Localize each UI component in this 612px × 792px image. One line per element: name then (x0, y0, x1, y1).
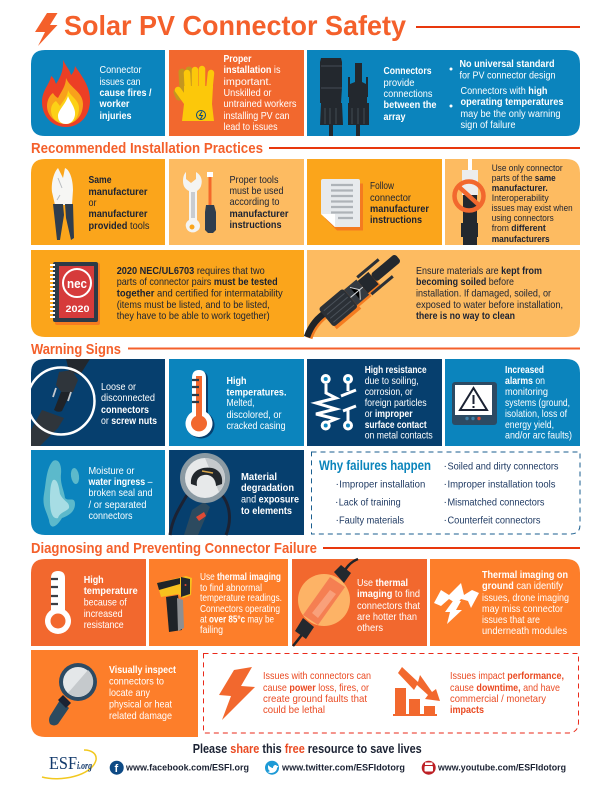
text (505, 365, 572, 442)
impact text (450, 671, 564, 716)
text: cause fires / (100, 88, 152, 99)
text: related damage (109, 711, 172, 722)
icon: resistor and open switch (316, 376, 356, 429)
text: others (357, 623, 383, 634)
text (230, 175, 288, 231)
panel: proper installation (169, 50, 304, 136)
heading: Why failures happen (319, 458, 431, 473)
panel: thermal readings (149, 559, 288, 646)
text: untrained workers (224, 99, 296, 110)
text: and/or arc faults) (505, 430, 572, 442)
text: Thermal imaging on (482, 570, 568, 581)
text: failing (200, 625, 223, 636)
text: manufacturer (88, 209, 148, 220)
icon: lightning bolt (35, 13, 58, 46)
text: manufacturer. (492, 183, 548, 194)
text: from different (492, 223, 546, 234)
text: issues may exist when (492, 203, 573, 214)
text: corrosion, or (365, 387, 413, 398)
text: ground can identify (482, 581, 564, 592)
text (101, 382, 157, 427)
social: facebook: f (114, 763, 118, 775)
text: worker (99, 99, 130, 110)
failure list: Mismatched connectors (448, 498, 544, 508)
text: due to soiling, (365, 376, 419, 387)
impact text: impacts (450, 705, 484, 716)
icon: flame (42, 60, 90, 127)
text: Interoperability (492, 193, 549, 204)
logo: ESFi.org (42, 750, 96, 779)
impact text: commercial / monetary (450, 694, 547, 705)
text (200, 572, 282, 636)
icon: no mixed connectors (454, 159, 484, 245)
panel: high resistance (307, 359, 442, 446)
text: cracked casing (226, 421, 286, 432)
text: resistance (84, 620, 124, 631)
text: Same (88, 175, 112, 186)
impact text: Issues impact performance, (450, 671, 564, 682)
icon: screwdriver (205, 172, 216, 233)
logo: ESFi.org: ESF (49, 753, 77, 773)
text: instructions (230, 220, 282, 231)
bullet text: operating temperatures (460, 97, 564, 108)
text: Ensure materials are kept from (416, 266, 542, 277)
bullet text (450, 59, 564, 131)
panel: proper tools (169, 159, 304, 245)
icon: white thermometer (45, 571, 71, 634)
text: are hotter than (357, 612, 417, 623)
text: and exposure (241, 494, 299, 506)
icon: thermal camera (157, 576, 192, 632)
text (384, 66, 437, 123)
text (482, 570, 569, 637)
text: installation is (224, 65, 280, 76)
bullet text: for PV connector design (460, 70, 556, 82)
text: at over 85°c may be (200, 614, 274, 626)
panel: loose connectors (28, 359, 165, 446)
text (109, 665, 176, 722)
text: underneath modules (482, 626, 567, 637)
text: temperature (84, 586, 138, 597)
panel: same manufacturer parts (445, 159, 580, 245)
text: manufacturers (492, 234, 550, 245)
text: imaging to find (357, 589, 420, 600)
panel: high temperature (31, 559, 146, 646)
panel: visual inspection (31, 650, 198, 737)
text: installing PV can (224, 111, 290, 122)
text: 2020 NEC/UL6703 requires that two (117, 266, 265, 277)
text: on metal contacts (365, 430, 433, 442)
icon: gloves (177, 69, 214, 121)
text: temperature readings. (200, 593, 282, 604)
bullet text: Connectors with high (460, 86, 548, 97)
text: manufacturer (88, 187, 148, 198)
heading: recommended installation practices: Recommended Installation Practices (31, 140, 263, 157)
consequence text: Issues with connectors can (263, 671, 371, 682)
text (357, 578, 420, 634)
text (370, 181, 429, 226)
text: Visually inspect (109, 665, 176, 676)
panel: same manufacturer tools (31, 159, 165, 245)
text: there is no way to clean (416, 311, 515, 322)
text: Increased (505, 365, 544, 376)
text: broken seal and (88, 488, 153, 499)
failure list: · (444, 461, 447, 472)
text: may miss connector (482, 604, 563, 615)
text: foreign particles (365, 398, 427, 409)
text (492, 163, 573, 245)
text: connectors that (357, 601, 420, 612)
icon: document (321, 179, 363, 230)
text: issues can (100, 77, 141, 88)
logo: ESFi.org: i.org (77, 761, 92, 772)
social: youtube: www.youtube.com/ESFIdotorg (437, 762, 566, 774)
text: installation. If damaged, soiled, or (416, 288, 551, 300)
text (365, 365, 433, 442)
panel: material degradation (169, 450, 304, 535)
panel: keep materials clean (307, 248, 580, 338)
social: twitter: www.twitter.com/ESFIdotorg (281, 762, 405, 774)
failure list: Faulty materials (339, 516, 404, 526)
text: together and certified for intermatability (117, 288, 283, 300)
failure list: Lack of training (339, 498, 401, 508)
failure list: · (336, 479, 339, 490)
text (88, 466, 153, 522)
icon: declining bar chart (393, 667, 440, 716)
panel: connector fires (31, 50, 165, 136)
text: connectors (88, 511, 132, 522)
panel: hotter connectors (292, 559, 427, 646)
text: surface contact (365, 420, 427, 431)
panel: increased alarms (445, 359, 580, 446)
failure list: · (444, 515, 447, 526)
icon: orange lightning bolt (219, 667, 255, 720)
panel: thermal imaging on ground (430, 559, 580, 646)
consequence text (263, 671, 371, 716)
text: water ingress – (88, 477, 153, 488)
icon: monitor alarm (452, 382, 497, 425)
text: connections (384, 89, 432, 100)
title text: Solar PV Connector Safety (64, 10, 406, 41)
text (99, 65, 152, 122)
heading: warning signs: Warning Signs (31, 341, 121, 358)
text: or (88, 198, 97, 209)
text: physical or heat (109, 700, 172, 710)
impact text: cause downtime, and have (450, 683, 560, 694)
text: because of (84, 598, 127, 608)
text: Proper tools (230, 175, 278, 186)
text (241, 472, 299, 517)
text: instructions (370, 215, 422, 226)
text: to elements (241, 506, 292, 517)
icon: connector pair (320, 58, 369, 136)
consequence text: could be lethal (263, 705, 325, 716)
icon: NEC code book (50, 262, 100, 325)
text: discolored, or (226, 410, 282, 421)
title (35, 10, 580, 46)
text: Moisture or (88, 466, 135, 477)
text: they have to be able to work together) (117, 311, 270, 322)
text: injuries (100, 111, 132, 122)
text: Use thermal imaging (200, 572, 281, 583)
panel: why failures happen (312, 452, 580, 534)
text: alarms on (505, 376, 545, 387)
failure list: Soiled and dirty connectors (448, 462, 558, 472)
social: facebook (110, 761, 249, 775)
bullet text: sign of failure (460, 120, 516, 131)
text: / or separated (88, 500, 147, 511)
text (117, 266, 283, 322)
icon: thermal view of connector (293, 559, 358, 646)
failure list: · (444, 497, 447, 508)
text: connectors to (109, 676, 164, 688)
text: important. (224, 77, 272, 88)
text: Unskilled or (224, 88, 272, 99)
text: (items must be listed, and to be listed, (117, 300, 270, 311)
text: provided tools (88, 221, 150, 232)
failure list: · (336, 515, 339, 526)
failure list: · (444, 479, 447, 490)
icon: disconnected connector (28, 359, 94, 446)
text (416, 266, 563, 322)
text: Use thermal (357, 578, 408, 589)
text (224, 54, 296, 133)
text: or screw nuts (101, 416, 157, 427)
bullet text: No universal standard (460, 59, 554, 70)
heading: diagnosing and preventing: Diagnosing and Preventing Connector Failure (31, 540, 317, 557)
icon: water puddle (43, 460, 80, 527)
social: youtube (422, 761, 566, 775)
failure list: Counterfeit connectors (448, 516, 540, 526)
text: isolation, loss of (505, 409, 567, 420)
text: High (84, 575, 104, 586)
text: provide (384, 78, 415, 89)
consequence text: cause power loss, fires, or (263, 683, 369, 694)
text: parts of connector pairs must be tested (117, 277, 278, 288)
text: Loose or (101, 382, 136, 393)
text: according to (230, 197, 280, 208)
icon: connector with cable (307, 248, 406, 338)
text: using connectors (492, 213, 554, 224)
panel: follow instructions (307, 159, 442, 245)
bullet text: may be the only warning (460, 109, 561, 120)
text: lead to issues (224, 122, 278, 133)
text: Connectors (384, 66, 432, 77)
text: manufacturer (370, 204, 429, 215)
social: twitter (265, 761, 405, 775)
text: between the (384, 100, 437, 111)
text (226, 376, 287, 432)
text: Proper (224, 54, 252, 65)
text: or improper (365, 409, 413, 420)
text: becoming soiled before (416, 277, 514, 288)
text: array (384, 112, 406, 123)
text: High (226, 376, 246, 387)
icon: crimping pliers (52, 168, 74, 240)
failure list: Improper installation (339, 480, 426, 490)
footer call to action: Please share this free resource to save lives (193, 742, 422, 756)
icon: white burst (434, 583, 479, 624)
icon: magnifying glass (49, 663, 97, 726)
text (88, 175, 150, 232)
icon: NEC code book: 2020 (66, 304, 90, 314)
text: Connector (100, 65, 142, 76)
text: degradation (241, 483, 294, 494)
panel: connectors (307, 50, 580, 136)
social: facebook: www.facebook.com/ESFI.org (125, 762, 249, 774)
panel: NEC requirement (31, 250, 304, 337)
text: Material (241, 472, 277, 483)
failure list: · (335, 497, 338, 508)
icon: magnifier on connector (170, 453, 230, 535)
text: temperatures. (226, 388, 287, 398)
panel: moisture (31, 450, 165, 535)
text: connectors (101, 405, 149, 416)
text: manufacturer (230, 209, 288, 220)
text (84, 575, 138, 631)
text: Melted, (226, 398, 254, 409)
text: Follow (370, 181, 394, 192)
failure list: Improper installation tools (448, 480, 556, 490)
text: Connectors operating (200, 604, 280, 615)
icon: NEC code book: nec (67, 276, 87, 291)
text: monitoring (505, 387, 548, 398)
text: exposed to water before installation, (416, 300, 563, 311)
icon: thermometer (186, 370, 214, 439)
text: High resistance (365, 365, 427, 376)
text: connector (370, 193, 411, 204)
text: locate any (109, 688, 151, 699)
text: disconnected (101, 393, 155, 404)
text: to find abnormal (200, 583, 262, 594)
text: parts of the same (492, 173, 556, 184)
text: energy yield, (505, 420, 554, 431)
text: issues that are (482, 615, 540, 626)
text: Use only connector (492, 163, 563, 174)
panel: consequences (204, 654, 578, 733)
text: systems (ground, (505, 398, 570, 409)
panel: high temperatures (169, 359, 304, 446)
failure list (335, 461, 558, 526)
consequence text: create ground faults that (263, 694, 367, 705)
icon: wrench (183, 172, 202, 232)
text: issues, drone imaging (482, 593, 569, 604)
text: increased (84, 609, 123, 620)
text: must be used (230, 186, 284, 197)
